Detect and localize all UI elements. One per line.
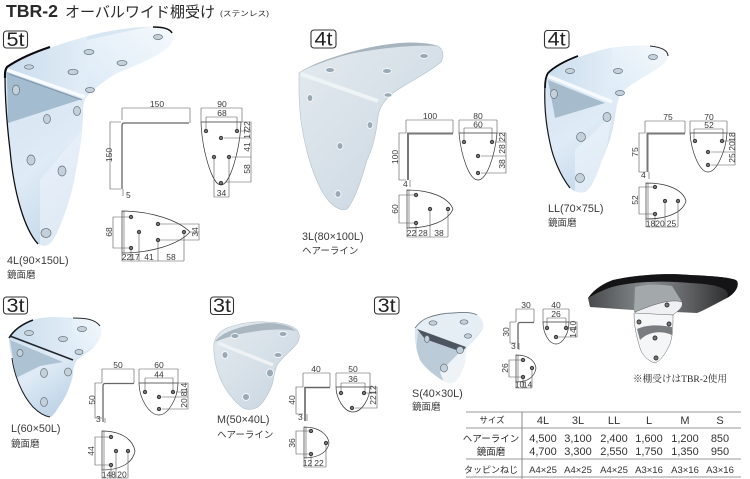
side drawing: 68: [104, 227, 114, 237]
front drawing: 20: [179, 398, 189, 408]
thickness badge 3t: 3t: [378, 296, 397, 317]
price table: 1,750: [635, 446, 663, 458]
front drawing: 50: [348, 364, 358, 374]
side drawing: [390, 190, 453, 238]
price table: [463, 412, 741, 479]
front drawing: 68: [217, 108, 227, 118]
front drawing: 38: [497, 159, 507, 169]
front drawing: [336, 364, 378, 412]
price table: 3,300: [564, 446, 592, 458]
title: オーバルワイド棚受け: [65, 4, 215, 21]
front drawing: 70: [704, 112, 714, 122]
title: TBR-2: [6, 1, 58, 21]
photo: S bracket: [414, 312, 484, 384]
price table: LL: [608, 415, 620, 427]
section drawing: [390, 111, 453, 189]
side drawing: 18: [646, 218, 655, 228]
label: [217, 414, 273, 441]
price table: A3×16: [706, 465, 734, 476]
front drawing: 8: [179, 391, 189, 396]
side drawing: [500, 355, 536, 390]
side drawing: 22: [314, 458, 324, 468]
side drawing: 41: [144, 252, 154, 262]
side drawing: 14: [523, 380, 532, 390]
label: [7, 255, 69, 281]
section drawing: 100: [423, 111, 437, 121]
price table: ヘアーライン: [463, 434, 519, 445]
panel: LL bracket: [540, 30, 737, 229]
section drawing: 150: [150, 99, 164, 109]
section drawing: 75: [630, 147, 640, 157]
photo: 4L bracket: [4, 26, 174, 246]
price table: 4,700: [529, 446, 557, 458]
side drawing: [630, 183, 686, 228]
side drawing: 44: [86, 446, 96, 456]
side drawing: 52: [630, 195, 640, 205]
front drawing: [459, 111, 507, 180]
label: LL(70×75L): [548, 203, 604, 215]
section drawing: 30: [521, 300, 531, 310]
section drawing: 3: [96, 414, 101, 424]
side drawing: 22: [122, 252, 131, 262]
front drawing: 17: [242, 129, 252, 139]
front drawing: 34: [217, 188, 226, 198]
label: 4L(90×150L): [7, 255, 69, 267]
thickness badge 3t: [374, 296, 399, 317]
price table: 3L: [572, 415, 584, 427]
price table: タッピンねじ: [464, 465, 518, 475]
side drawing: 22: [407, 228, 416, 238]
thickness badge 3t: 3t: [6, 296, 25, 317]
front drawing: [543, 300, 578, 344]
side drawing: 34: [190, 227, 200, 237]
label: [548, 203, 604, 229]
front drawing: 10: [568, 321, 578, 330]
front drawing: 41: [242, 142, 252, 152]
label: L(60×50L): [11, 423, 61, 435]
price table: 鏡面磨: [477, 446, 506, 458]
label: ヘアーライン: [217, 430, 273, 441]
front drawing: 52: [704, 120, 714, 130]
price table: 2,400: [600, 433, 628, 445]
side drawing: 58: [166, 252, 176, 262]
price table: 1,600: [635, 433, 663, 445]
panel: 4L bracket: [0, 20, 252, 281]
section drawing: [501, 300, 534, 351]
front drawing: 90: [217, 99, 227, 109]
side drawing: 28: [418, 228, 428, 238]
price table: 1,350: [671, 446, 699, 458]
price table: A3×16: [671, 465, 699, 476]
label: [412, 388, 463, 413]
section drawing: 50: [87, 395, 97, 405]
panel: S bracket: [374, 296, 578, 413]
side drawing: 25: [667, 218, 676, 228]
label: 鏡面磨: [11, 438, 40, 450]
wall bracket: [634, 285, 682, 363]
label: [302, 231, 364, 257]
price table: 1,200: [671, 433, 699, 445]
front drawing: 44: [154, 370, 164, 380]
section drawing: [87, 360, 134, 424]
front drawing: 14: [179, 383, 189, 392]
section drawing: [104, 99, 190, 200]
price table: A3×16: [635, 465, 663, 476]
price table: A4×25: [529, 465, 557, 476]
side drawing: 26: [500, 363, 510, 373]
price table: S: [716, 415, 724, 427]
side drawing: [86, 431, 135, 479]
photo: LL bracket: [544, 46, 668, 192]
front drawing: 60: [473, 120, 483, 130]
label: [11, 423, 61, 450]
label: 鏡面磨: [412, 401, 441, 413]
price table: 4L: [537, 415, 549, 427]
section drawing: 100: [390, 150, 400, 164]
thickness badge 4t: [544, 30, 569, 50]
front drawing: 25: [727, 153, 737, 163]
front drawing: 20: [727, 141, 737, 151]
front drawing: 40: [551, 300, 561, 310]
side drawing: 38: [434, 228, 444, 238]
title: (ステンレス): [220, 9, 270, 18]
section drawing: 5: [126, 190, 131, 200]
title: [6, 1, 270, 21]
front drawing: 36: [348, 374, 358, 384]
price table: 4,500: [529, 433, 557, 445]
price table: 850: [711, 433, 729, 445]
label: S(40×30L): [412, 388, 463, 400]
front drawing: 18: [727, 132, 737, 142]
front drawing: 22: [368, 395, 378, 405]
thickness badge 3t: [4, 296, 28, 317]
section drawing: 30: [501, 327, 511, 337]
price table: 2,550: [600, 446, 628, 458]
front drawing: 60: [154, 360, 164, 370]
label: 3L(80×100L): [302, 231, 364, 243]
side drawing: [287, 427, 329, 468]
thickness badge 5t: [4, 30, 28, 51]
section drawing: 4: [641, 170, 646, 180]
section drawing: 40: [311, 364, 321, 374]
label: ヘアーライン: [302, 246, 358, 257]
photo: L bracket: [8, 317, 102, 418]
price table: 3,100: [564, 433, 592, 445]
section drawing: 3: [511, 341, 516, 351]
section drawing: 3: [298, 412, 303, 422]
thickness badge 3t: 3t: [213, 296, 232, 317]
side drawing: 20: [655, 218, 665, 228]
price table: L: [646, 415, 652, 427]
panel: 3L bracket: [299, 30, 507, 257]
section drawing: 50: [113, 360, 123, 370]
panel: M bracket: [210, 296, 378, 468]
section drawing: 150: [104, 148, 114, 162]
label: 鏡面磨: [548, 217, 577, 229]
side drawing: [104, 211, 200, 262]
price table: サイズ: [479, 415, 505, 425]
front drawing: 80: [473, 111, 483, 121]
caption: ※棚受けはTBR-2使用: [633, 373, 727, 385]
shelf board: [588, 274, 738, 313]
section drawing: 40: [287, 395, 297, 405]
front drawing: 14: [568, 328, 578, 338]
side drawing: 10: [515, 380, 524, 390]
label: 鏡面磨: [7, 269, 36, 281]
price table: 950: [711, 446, 729, 458]
section drawing: 75: [663, 112, 673, 122]
side drawing: 17: [130, 252, 140, 262]
price table: A4×25: [564, 465, 592, 476]
side drawing: 12: [303, 458, 312, 468]
panel: L bracket: [4, 296, 189, 479]
thickness badge 4t: [311, 30, 336, 50]
front drawing: 22: [497, 132, 507, 142]
thickness badge 4t: 4t: [548, 30, 567, 50]
front drawing: 22: [242, 121, 252, 131]
front drawing: 12: [368, 385, 378, 395]
thickness badge 3t: [210, 296, 234, 317]
photo: shelf with bracket: [588, 274, 738, 363]
front drawing: [201, 99, 252, 198]
front drawing: [690, 112, 737, 172]
front drawing: 58: [242, 164, 252, 174]
front drawing: 26: [551, 309, 561, 319]
side drawing: 36: [287, 438, 297, 448]
section drawing: [630, 112, 685, 180]
photo: M bracket: [214, 322, 299, 409]
side drawing: 60: [390, 204, 400, 214]
price table: M: [680, 415, 690, 427]
price table: A4×25: [600, 465, 628, 476]
front drawing: 28: [497, 144, 507, 154]
photo: 3L bracket: [299, 43, 443, 210]
thickness badge 4t: 4t: [314, 30, 333, 50]
front drawing: [139, 360, 189, 415]
section drawing: 4: [403, 179, 408, 189]
label: M(50×40L): [217, 414, 270, 426]
thickness badge 5t: 5t: [6, 30, 25, 51]
section drawing: [287, 364, 330, 422]
